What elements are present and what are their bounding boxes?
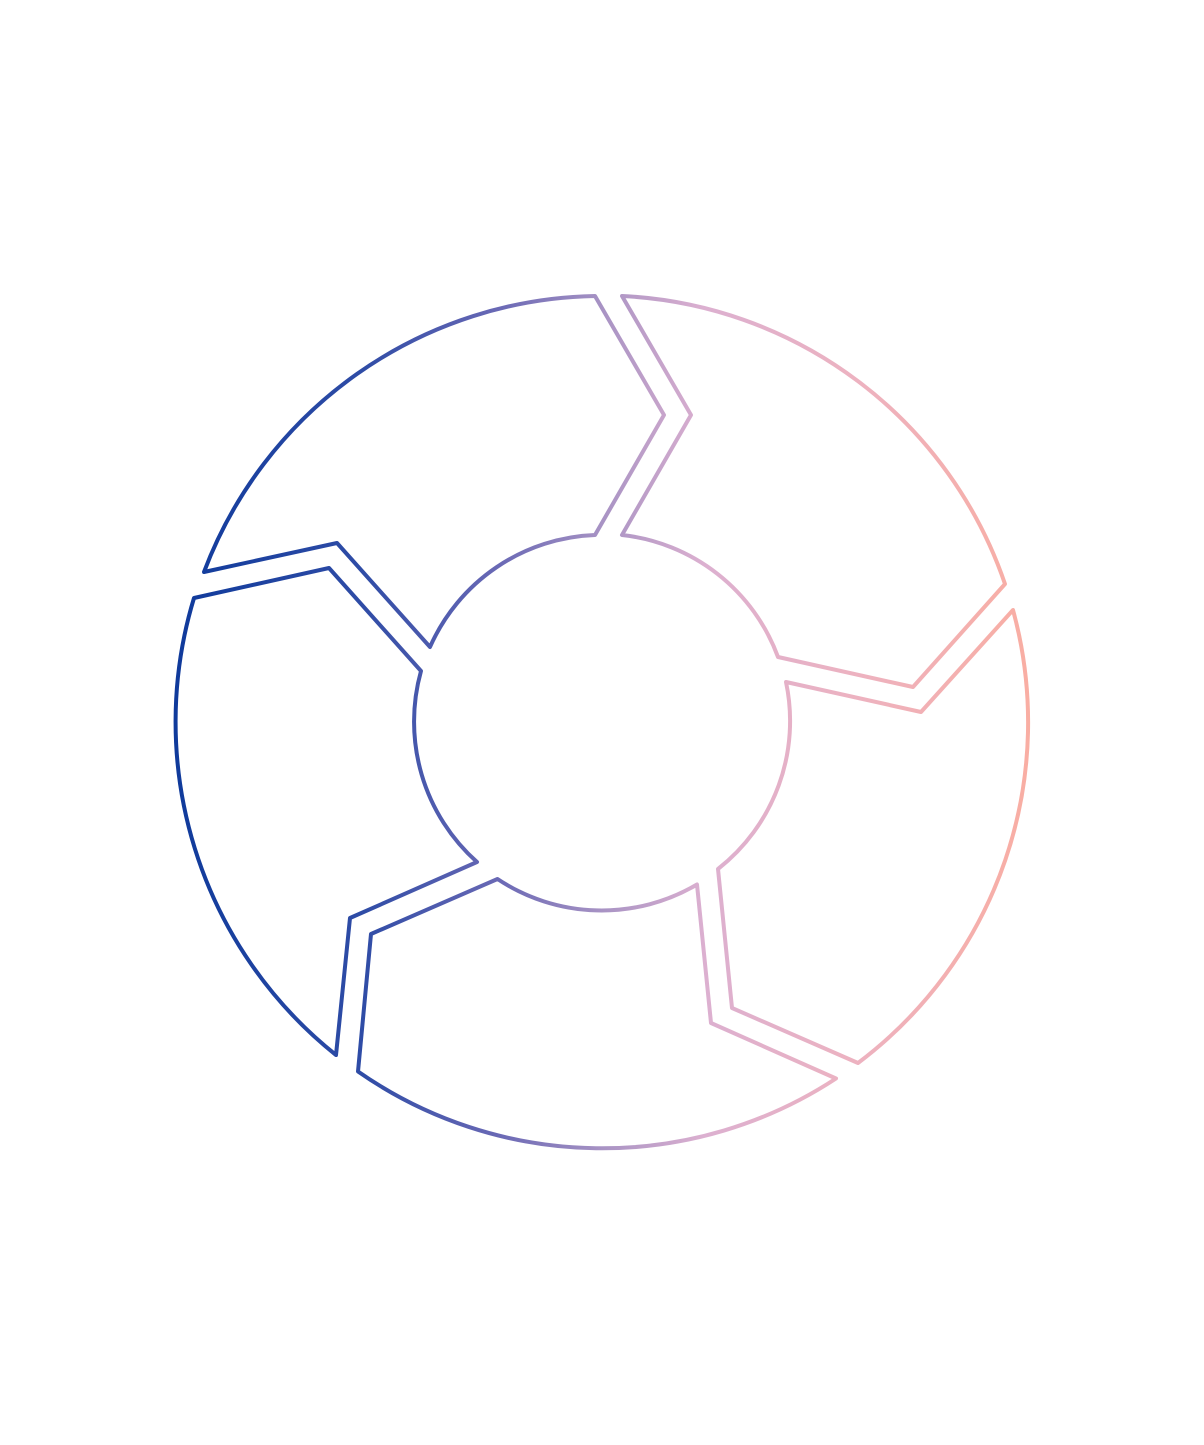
segment: top left arrow: [204, 296, 664, 647]
segment: right arrow: [718, 610, 1028, 1063]
segment: left arrow: [176, 568, 477, 1055]
segment: bottom arrow: [358, 879, 836, 1148]
cycle segments: [176, 296, 1028, 1148]
segment: top right arrow: [622, 296, 1005, 687]
